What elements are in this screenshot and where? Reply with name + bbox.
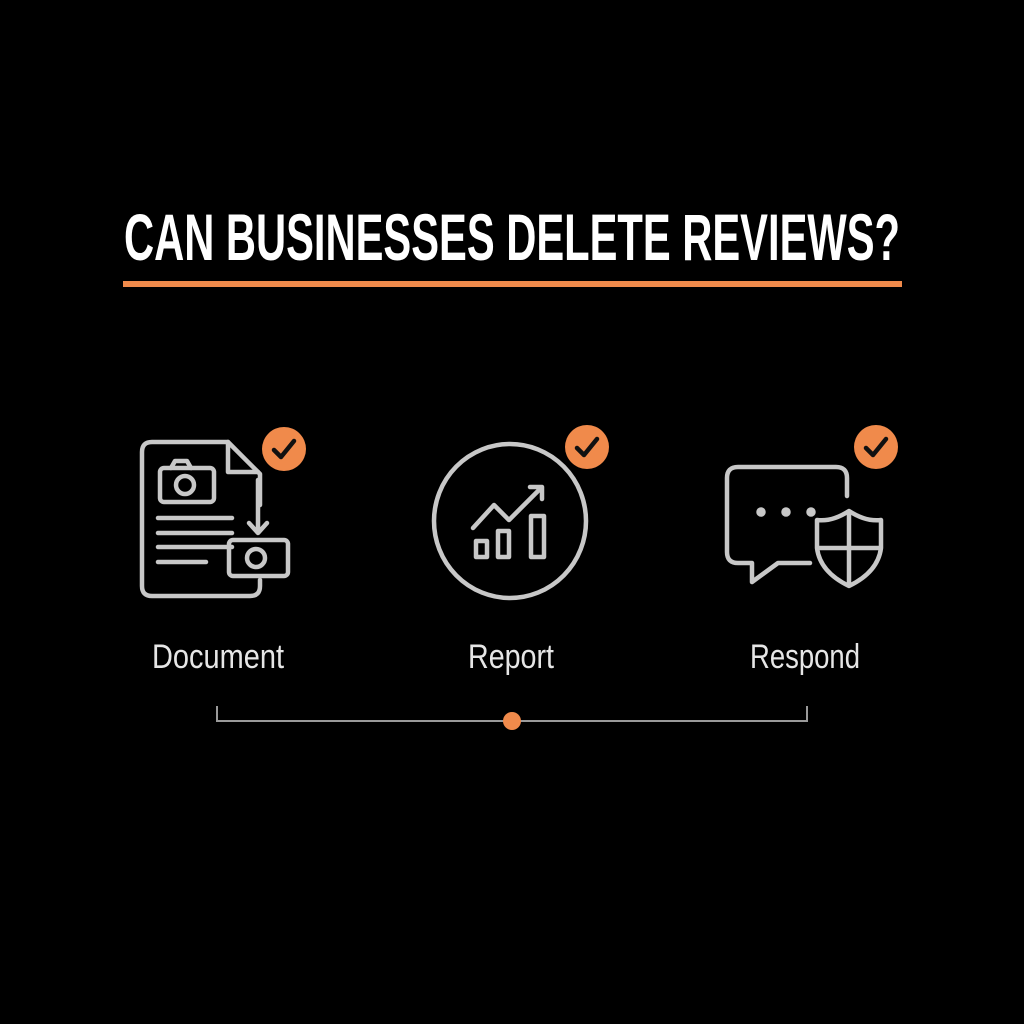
- icon: respond bubble and shield: [727, 467, 881, 586]
- badge: document check: [262, 427, 306, 471]
- timeline connector: [217, 706, 807, 730]
- icon: report chart: [434, 444, 586, 598]
- label: Report: Report: [468, 638, 554, 676]
- label: Respond: Respond: [750, 638, 860, 676]
- title underline: [123, 281, 902, 287]
- icon: document: [142, 442, 288, 596]
- label: Document: Document: [152, 638, 284, 676]
- badge: report check: [565, 425, 609, 469]
- badge: respond check: [854, 425, 898, 469]
